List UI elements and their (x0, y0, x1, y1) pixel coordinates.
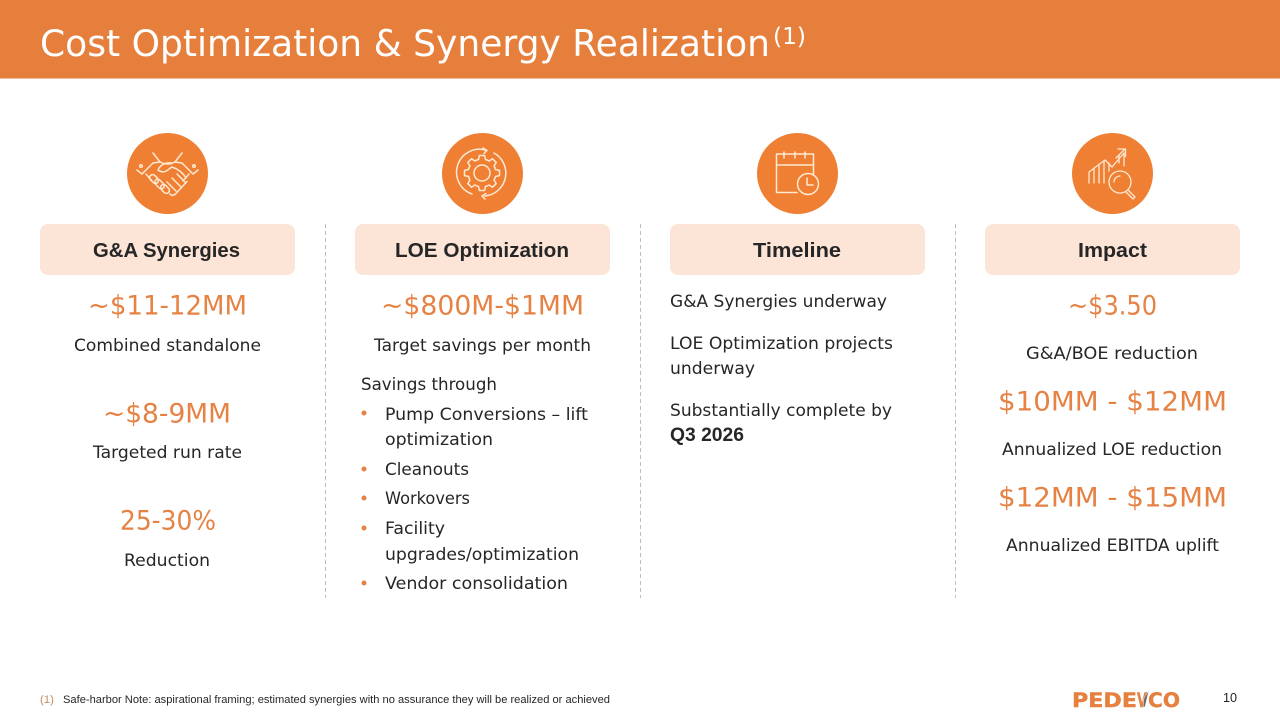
metric: reduction: Reduction (124, 551, 210, 571)
metric: annualized EBITDA uplift: $12MM - $15MM (998, 482, 1227, 514)
text: completion date: Q3 2026 (670, 425, 744, 446)
bullet list: Pump Conversions – lift (385, 405, 588, 425)
metric: annualized LOE reduction: Annualized LOE reduction (1002, 440, 1222, 460)
panel: Timeline (670, 133, 925, 446)
text: LOE status: LOE Optimization projects (670, 334, 893, 354)
heading: Timeline: Timeline (753, 239, 841, 262)
page number: 10 (1223, 691, 1237, 705)
heading: Timeline (670, 224, 925, 275)
icon: calendar with clock (757, 133, 838, 214)
text: completion date (670, 401, 892, 446)
logo: PEDEVCO: CO (1148, 689, 1180, 712)
metric: targeted run rate: Targeted run rate (92, 443, 242, 463)
metric: annualized EBITDA uplift: Annualized EBITDA uplift (1006, 536, 1219, 556)
text: LOE status (670, 334, 893, 379)
bullet list: Cleanouts (385, 460, 469, 480)
text: completion date: Substantially complete by (670, 401, 892, 421)
metric: G&A/BOE reduction: G&A/BOE reduction (1026, 344, 1198, 364)
metric: combined standalone (74, 290, 261, 356)
title: Cost Optimization & Synergy Realization (40, 22, 770, 65)
text block: savings through: Savings through (361, 375, 497, 395)
icon: gear with arrows (442, 133, 523, 214)
metric: G&A/BOE reduction (1026, 290, 1198, 364)
footnote: (1) (40, 694, 54, 706)
heading: G&A Synergies: G&A Synergies (93, 239, 240, 262)
heading: G&A Synergies (40, 224, 295, 275)
metric: G&A/BOE reduction: ~$3.50 (1068, 290, 1157, 322)
metric: combined standalone: Combined standalone (74, 336, 261, 356)
title: (1) (773, 24, 806, 50)
bullet list: Vendor consolidation (385, 574, 568, 594)
metric: target savings per month: Target savings per month (373, 336, 591, 356)
bullet list: optimization (385, 430, 493, 450)
text: G&A status: G&A Synergies underway (670, 292, 887, 312)
metric: annualized LOE reduction (998, 386, 1227, 460)
metric: target savings per month: ~$800M-$1MM (381, 290, 584, 322)
logo: PEDEVCO: PEDE (1072, 689, 1137, 712)
panel: Impact (985, 133, 1240, 556)
panel: LOE Optimization (355, 133, 610, 594)
logo: PEDEVCO (1072, 689, 1180, 712)
panel: G&A Synergies (40, 133, 295, 571)
icon: chart with magnifier (1072, 133, 1153, 214)
metric: target savings per month (373, 290, 591, 356)
text: LOE status: underway (670, 359, 755, 379)
heading: Impact (985, 224, 1240, 275)
metric: annualized EBITDA uplift (998, 482, 1227, 556)
heading: Impact: Impact (1078, 239, 1147, 262)
bullet list: Workovers (385, 489, 470, 509)
text block: savings through (361, 375, 588, 594)
metric: targeted run rate (92, 398, 242, 463)
bullet list (362, 405, 588, 594)
logo: PEDEVCO: V (1137, 689, 1147, 712)
metric: combined standalone: ~$11-12MM (88, 290, 247, 322)
heading: LOE Optimization: LOE Optimization (395, 239, 569, 262)
icon: handshake (127, 133, 208, 214)
bullet list: Facility (385, 519, 445, 539)
heading: LOE Optimization (355, 224, 610, 275)
metric: reduction: 25-30% (120, 506, 216, 536)
metric: reduction (120, 506, 216, 571)
title banner (0, 0, 1280, 78)
metric: targeted run rate: ~$8-9MM (103, 398, 231, 430)
footnote: Safe-harbor Note: aspirational framing; estimated synergies with no assurance they will be realized or achieved (63, 694, 610, 706)
metric: annualized LOE reduction: $10MM - $12MM (998, 386, 1227, 418)
bullet list: upgrades/optimization (385, 545, 579, 565)
